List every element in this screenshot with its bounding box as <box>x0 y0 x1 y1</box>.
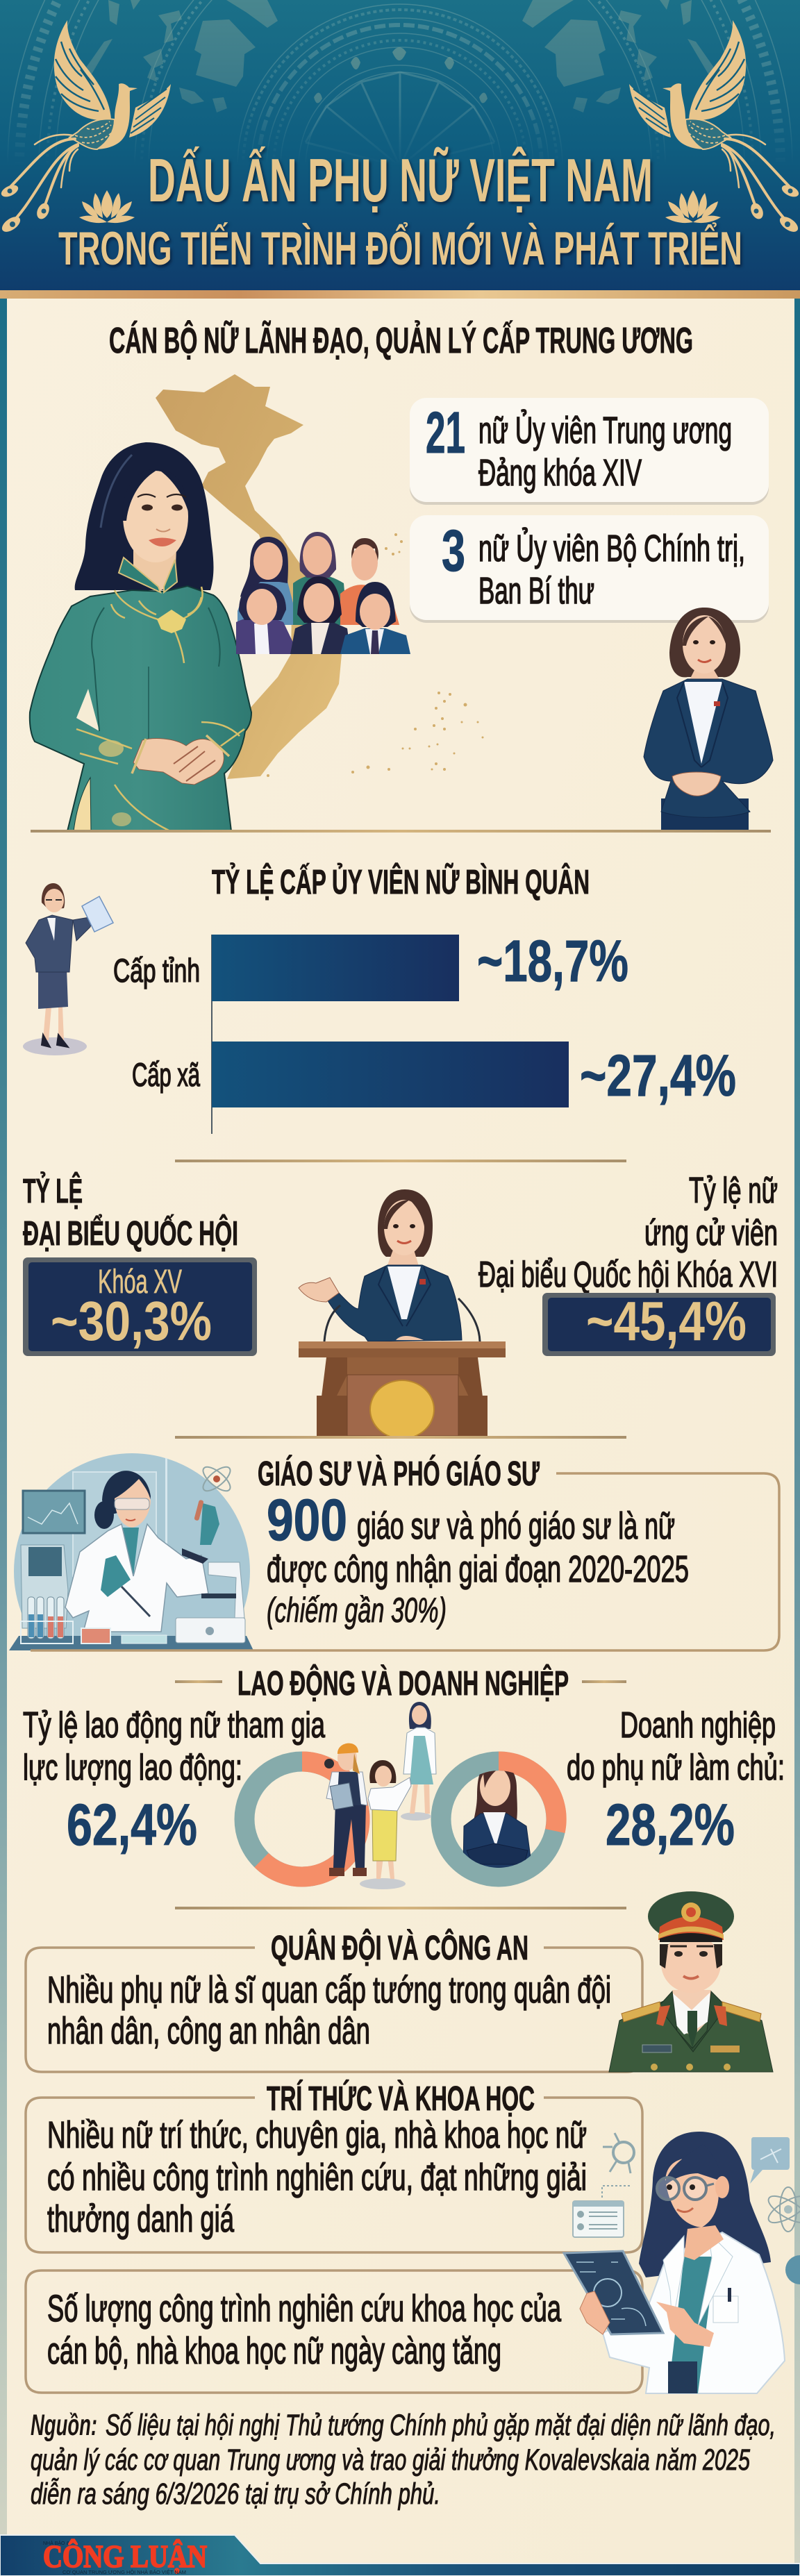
worker <box>324 1743 367 1876</box>
baseline rule <box>31 830 771 833</box>
map of Vietnam <box>156 374 483 779</box>
bar: provincial <box>212 935 459 1001</box>
card: 21 members: 21 <box>426 400 465 465</box>
gold band <box>0 290 800 299</box>
office woman <box>360 1760 411 1889</box>
illustration: businesswoman <box>463 1762 532 1868</box>
atom icon <box>203 1466 231 1491</box>
bar: commune <box>212 1042 569 1107</box>
device <box>21 1545 68 1628</box>
header banner <box>0 0 800 290</box>
icon: left phoenix <box>0 20 171 235</box>
ao dai body <box>30 586 251 831</box>
panel: army and police: nhân dân, công an nhân dân <box>47 2010 370 2052</box>
podium emblem <box>370 1380 434 1439</box>
footer logo: CƠ QUAN TRUNG ƯƠNG HỘI NHÀ BÁO VIỆT NAM <box>62 2569 186 2575</box>
hands <box>580 2291 610 2334</box>
illustration: female lab scientist <box>9 1453 253 1650</box>
panel: intellectuals <box>26 2098 642 2252</box>
label: provincial: Cấp tỉnh <box>113 952 200 989</box>
woman <box>94 1501 114 1529</box>
icon: left lotus <box>79 190 135 223</box>
tablet <box>564 2251 663 2334</box>
text: labour participation: lực lượng lao động: <box>23 1748 242 1788</box>
bronze drum pattern <box>8 0 792 151</box>
source note: diễn ra sáng 6/3/2026 tại trụ sở Chính phủ. <box>31 2477 440 2511</box>
text: labour participation <box>23 1705 325 1857</box>
card: 3 members <box>410 515 769 623</box>
footer logo: CÔNG LUẬN <box>43 2539 207 2574</box>
divider <box>175 1160 626 1162</box>
coat <box>603 2232 785 2393</box>
stat box: term XV: Khóa XV <box>98 1264 182 1300</box>
text: national assembly ratio: TỶ LỆ <box>23 1172 83 1210</box>
stat box: term XV <box>23 1257 257 1356</box>
decorative science icons <box>573 2133 800 2284</box>
title <box>58 146 742 275</box>
value: provincial: ~18,7% <box>477 928 628 994</box>
bench <box>9 1636 253 1650</box>
icon: right phoenix <box>629 20 800 235</box>
source note: Nguồn: <box>31 2409 97 2442</box>
illustration: three working women <box>324 1702 436 1889</box>
panel: army and police <box>26 1929 642 2072</box>
heading: GIÁO SƯ VÀ PHÓ GIÁO SƯ <box>258 1455 540 1493</box>
text: national assembly ratio: ĐẠI BIỂU QUỐC HỘI <box>23 1214 238 1253</box>
illustration: woman with document <box>23 883 113 1055</box>
heading: QUÂN ĐỘI VÀ CÔNG AN <box>271 1929 528 1967</box>
illustration: army officer <box>609 1891 773 2072</box>
heading: female committee ratio: TỶ LỆ CẤP ỦY VIÊN NỮ BÌNH QUÂN <box>212 863 590 901</box>
source note <box>31 2409 776 2511</box>
icon: right lotus <box>665 190 721 223</box>
footer band <box>0 2535 800 2576</box>
stat box: term XVI: ~45,4% <box>586 1290 747 1352</box>
heading: labour and enterprise: LAO ĐỘNG VÀ DOANH NGHIỆP <box>238 1664 569 1703</box>
test tubes <box>28 1597 64 1639</box>
panel: professors: (chiếm gần 30%) <box>267 1591 447 1630</box>
panel: intellectuals: thưởng danh giá <box>47 2198 235 2240</box>
left side border <box>0 299 7 2538</box>
card: 3 members: 3 <box>442 518 465 583</box>
panel: research output <box>26 2270 642 2393</box>
donut chart: enterprise 28.2% <box>441 1762 556 1877</box>
monitor <box>23 1491 85 1533</box>
illustration: group of six women <box>236 532 410 654</box>
value: commune: ~27,4% <box>580 1043 736 1108</box>
text: women-owned enterprises <box>567 1705 785 1857</box>
axis <box>211 935 212 1134</box>
text: women-owned enterprises: 28,2% <box>606 1792 735 1857</box>
card: 21 members <box>410 398 769 505</box>
panel: professors <box>31 1455 779 1650</box>
heading: labour and enterprise <box>175 1664 626 1703</box>
illustration: scientist with tablet <box>564 2132 800 2393</box>
text: national assembly ratio <box>23 1172 238 1253</box>
heading: intellectuals and science: TRÍ THỨC VÀ KHOA HỌC <box>267 2080 535 2118</box>
stat: 900: 900 <box>267 1487 347 1553</box>
neck and face <box>684 2225 724 2260</box>
card: 3 members: Ban Bí thư <box>478 570 594 612</box>
footer logo: NHÀ BÁO & <box>43 2540 69 2546</box>
card: 21 members: Đảng khóa XIV <box>478 452 642 494</box>
bar chart <box>113 928 736 1134</box>
illustration: woman in navy suit <box>644 608 773 830</box>
divider <box>175 1436 626 1439</box>
text: labour participation: 62,4% <box>67 1792 197 1857</box>
doctor <box>401 1702 436 1821</box>
collar <box>119 558 160 592</box>
gold embroidery <box>76 587 244 831</box>
text: labour participation: Tỷ lệ lao động nữ tham gia <box>23 1705 325 1746</box>
illustration: woman in green ao dai <box>30 442 251 831</box>
label: commune: Cấp xã <box>132 1056 201 1093</box>
panel: research output: Số lượng công trình nghiên cứu khoa học của <box>47 2288 562 2330</box>
text: female candidates ratio <box>478 1171 778 1295</box>
illustration: woman at podium <box>299 1189 506 1440</box>
stat box: term XV: ~30,3% <box>51 1290 212 1352</box>
hands <box>133 739 224 785</box>
panel: research output: cán bộ, nhà khoa học nữ ngày càng tăng <box>47 2330 501 2372</box>
hair <box>639 2132 771 2277</box>
divider <box>175 1907 626 1909</box>
microscope <box>208 1562 244 1618</box>
right side border <box>794 299 800 2566</box>
donut chart: labour 62.4% <box>244 1762 360 1877</box>
